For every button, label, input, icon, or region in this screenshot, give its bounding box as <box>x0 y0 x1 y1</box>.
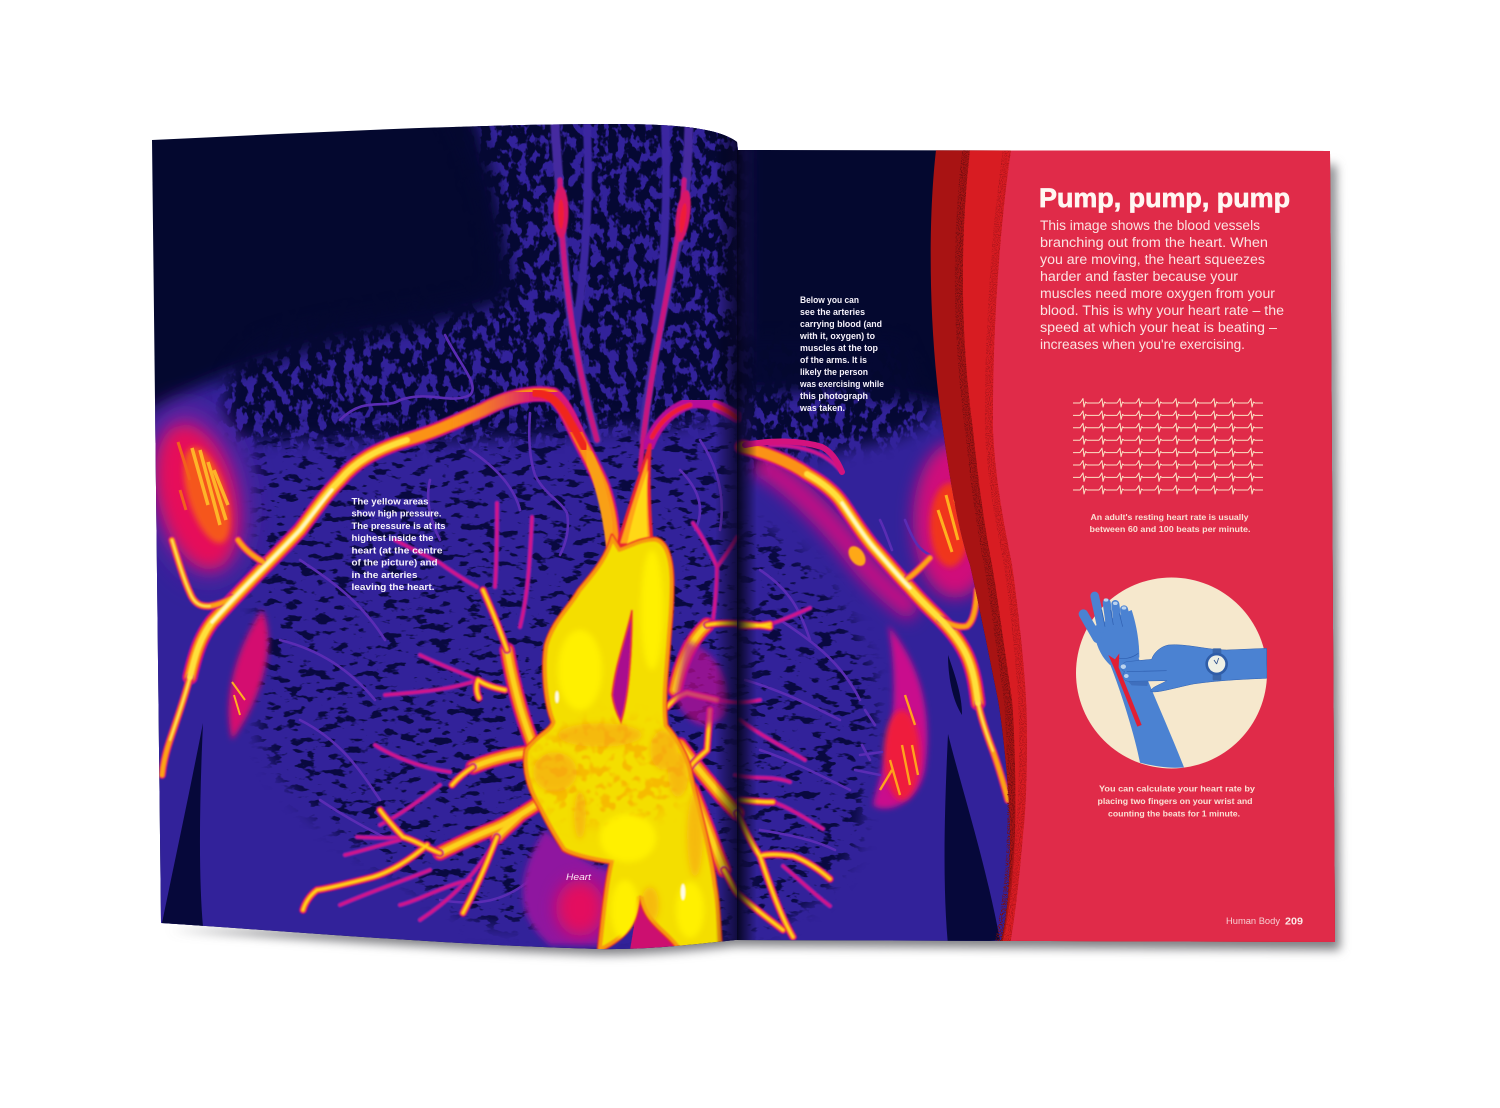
body text: muscles need more oxygen from your <box>1040 286 1276 301</box>
callout: arteries to muscles: carrying blood (and <box>800 319 882 329</box>
callout: yellow areas: show high pressure. <box>352 509 442 519</box>
fine purple veins <box>280 335 930 903</box>
callout: yellow areas: heart (at the centre <box>352 545 442 555</box>
grain edge on bright band <box>989 150 1023 945</box>
callout: yellow areas <box>352 496 446 592</box>
right arch <box>648 402 737 447</box>
caption: calculate heart rate: placing two fingers on your wrist and <box>1098 796 1252 806</box>
callout: arteries to muscles: likely the person <box>800 367 868 377</box>
callout: arteries to muscles: Below you can <box>800 295 859 305</box>
caption: calculate heart rate: You can calculate your heart rate by <box>1099 784 1255 794</box>
wristwatch <box>1205 648 1228 680</box>
magenta below heart <box>523 830 690 950</box>
heart shading <box>510 535 722 952</box>
heading: Pump, pump, pump <box>1039 183 1290 213</box>
right upper branch tip <box>745 441 842 472</box>
callout: arteries to muscles: of the arms. It is <box>800 355 867 365</box>
callout: yellow areas: highest inside the <box>352 533 434 543</box>
book spread <box>152 124 1347 962</box>
callout: arteries to muscles: see the arteries <box>800 307 865 317</box>
magenta around heart <box>675 640 728 726</box>
forearm and palm <box>1083 596 1184 768</box>
callout: arteries to muscles <box>799 295 884 413</box>
dark slit right <box>948 655 962 715</box>
arch top in red and magenta <box>440 394 576 430</box>
callout: yellow areas: leaving the heart. <box>352 582 434 592</box>
body text: blood. This is why your heart rate – the <box>1040 303 1284 318</box>
dark wedge left <box>162 723 203 927</box>
body text: This image shows the blood vessels <box>1040 218 1260 233</box>
grain edge on dark band <box>959 150 1011 945</box>
body text: speed at which your heat is beating – <box>1040 320 1278 335</box>
fingertips <box>1104 598 1126 610</box>
body text: branching out from the heart. When <box>1040 235 1268 250</box>
caption: resting heart rate: between 60 and 100 beats per minute. <box>1090 524 1250 534</box>
page shadow <box>170 165 1340 955</box>
illustration: taking a pulse <box>1076 578 1267 768</box>
heart <box>510 535 722 952</box>
neck and shoulder speckle <box>215 124 942 476</box>
orange spot on right artery <box>848 545 866 567</box>
body text: you are moving, the heart squeezes <box>1040 252 1265 267</box>
MRI image of arteries <box>155 124 1010 950</box>
footer: page number: Human Body <box>1226 916 1280 927</box>
heat patch: left arm muscle <box>134 398 260 586</box>
heat patch: right arm muscle <box>913 442 997 598</box>
white highlights <box>555 691 559 703</box>
left trunk into heart <box>588 455 611 545</box>
callout: arteries to muscles: with it, oxygen) to <box>799 331 875 341</box>
callout: arteries to muscles: was exercising while <box>799 379 884 389</box>
callout: yellow areas: The pressure is at its <box>352 521 446 531</box>
torso purple field <box>155 124 1010 950</box>
artery bright core <box>170 440 993 751</box>
spine shadow right <box>737 150 757 942</box>
callout: yellow areas: in the arteries <box>352 570 418 580</box>
callout: arteries to muscles: was taken. <box>799 403 845 413</box>
footer: page number <box>1226 916 1303 928</box>
panel: red wave bands <box>931 150 1340 945</box>
carotid arteries <box>554 125 694 470</box>
panel: open book pages <box>130 100 1340 990</box>
heat patch: right chest muscle <box>873 625 927 809</box>
right trunk into heart <box>618 445 652 545</box>
heart hollow <box>612 610 632 722</box>
body text <box>1040 218 1284 352</box>
label: heart: Heart <box>566 872 591 883</box>
heat patch: lower left <box>229 610 268 740</box>
main arteries <box>162 394 1008 800</box>
callout: yellow areas: The yellow areas <box>352 496 428 506</box>
pointing hand and arm <box>1121 645 1267 692</box>
caption: calculate heart rate: counting the beats for 1 minute. <box>1108 808 1240 818</box>
callout: yellow areas: of the picture) and <box>352 558 438 568</box>
caption: calculate heart rate <box>1098 784 1255 818</box>
body text: increases when you're exercising. <box>1040 337 1245 352</box>
caption: resting heart rate: An adult's resting heart rate is usually <box>1090 512 1249 522</box>
spine shadow left <box>715 120 737 948</box>
dark tissue mottling <box>240 400 900 950</box>
footer: page number: 209 <box>1285 916 1303 928</box>
thin pulmonary vessels <box>340 445 840 920</box>
pulmonary branches <box>303 590 830 937</box>
cream circle <box>1076 578 1267 768</box>
dark wedge right <box>945 734 1000 945</box>
callout: arteries to muscles: muscles at the top <box>800 343 878 353</box>
chart: heartbeat grid <box>1073 398 1263 494</box>
artery in wrist <box>1108 653 1142 727</box>
arch red centre <box>535 393 584 447</box>
magenta band under right artery <box>757 462 915 612</box>
body text: harder and faster because your <box>1040 269 1239 284</box>
callout: arteries to muscles: this photograph <box>800 391 868 401</box>
caption: resting heart rate <box>1090 512 1250 534</box>
